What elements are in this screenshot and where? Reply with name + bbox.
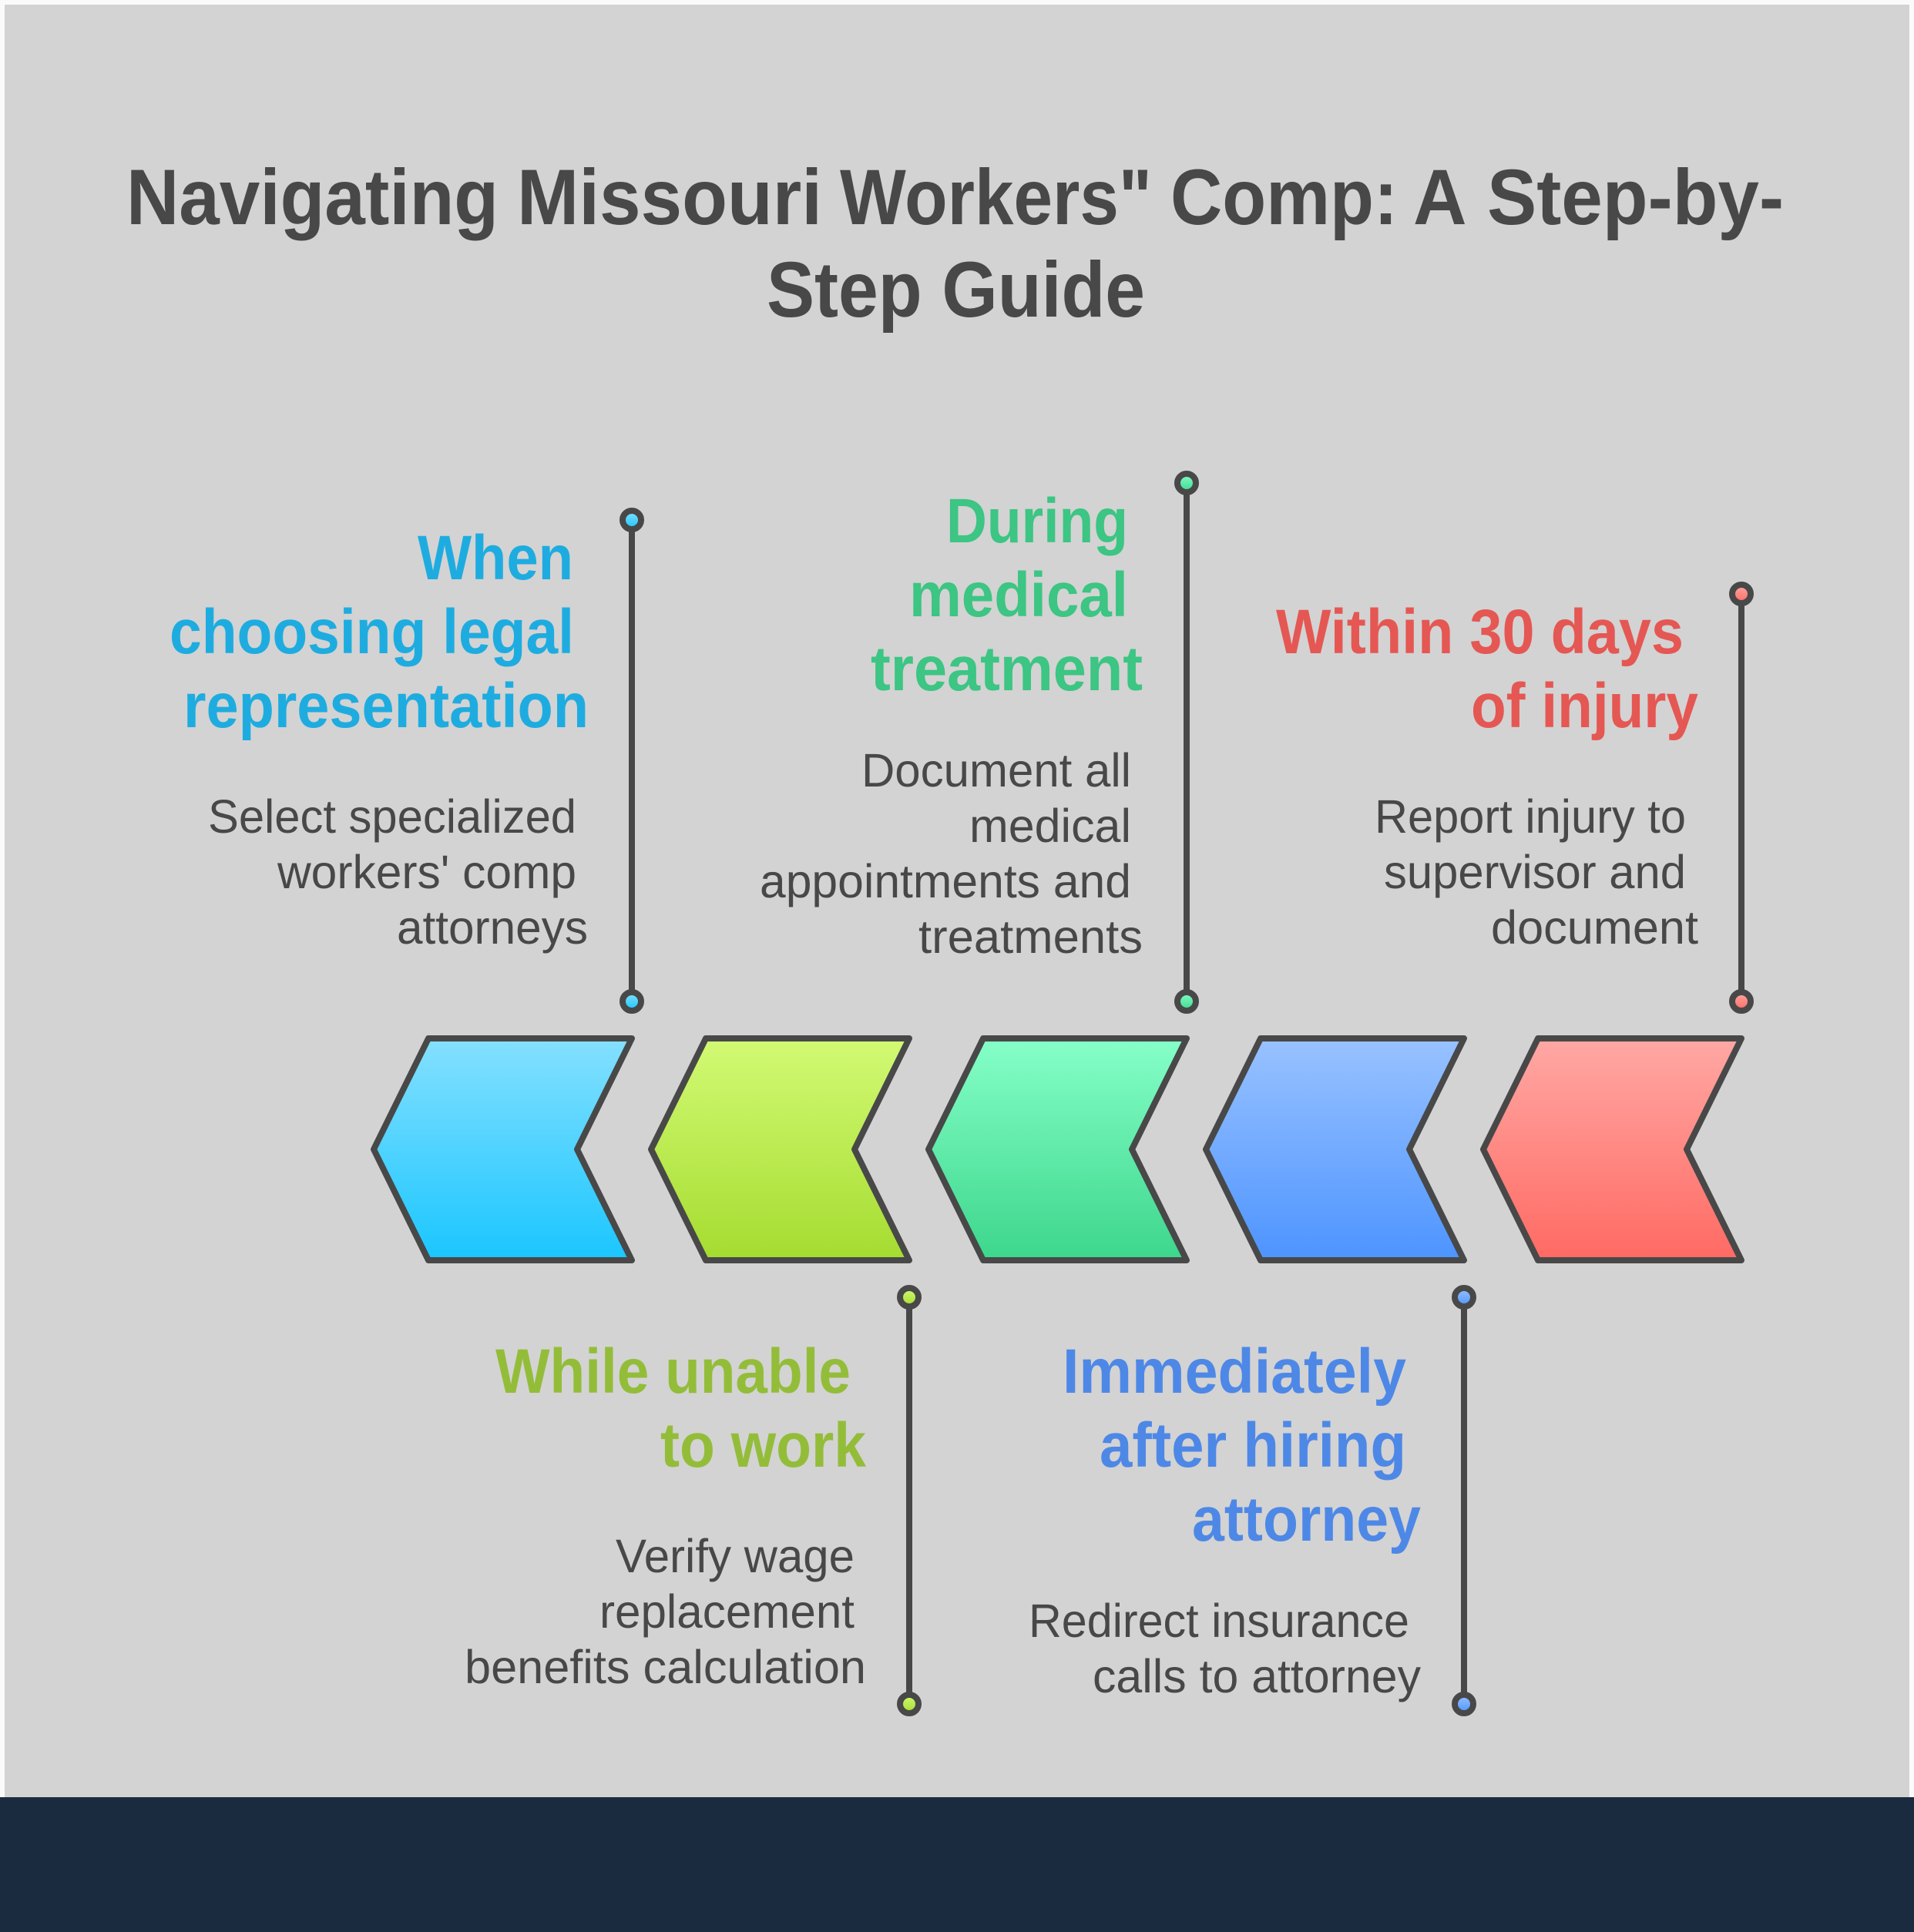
heading: while unable to work: While unable [495,1337,851,1407]
description: report injury [1375,790,1698,954]
heading: when choosing legal representation: choosing legal [170,597,574,667]
description: select attorneys: Select specialized [208,790,576,843]
panel: during medical treatment [760,474,1196,1011]
description: document appointments: medical [969,800,1131,852]
heading: when choosing legal representation [170,523,589,741]
description: select attorneys [208,790,588,954]
heading: when choosing legal representation: representation [183,671,589,741]
description: verify benefits: replacement [599,1585,855,1638]
heading: during medical treatment: During [946,486,1128,556]
heading: when choosing legal representation: When [418,523,573,593]
title: A [1413,153,1465,241]
heading: while unable to work: to work [660,1410,866,1481]
description: redirect calls [1029,1595,1421,1702]
chevron: medical treatment (teal) [928,1038,1187,1260]
chevron: hiring attorney (periwinkle) [1206,1038,1464,1260]
heading: during medical treatment: treatment [871,634,1143,704]
title: Step Guide [767,246,1145,334]
heading: while unable to work [495,1337,866,1481]
title: Navigating [126,153,499,241]
heading: during medical treatment: medical [909,560,1128,630]
description: report injury: document [1491,901,1698,954]
chevron: within 30 days (red) [1483,1038,1741,1260]
heading: within 30 days of injury: of injury [1471,671,1698,741]
description: select attorneys: workers' comp [277,846,576,898]
connector line with end dots (periwinkle) [1455,1288,1473,1713]
heading: immediately after hiring attorney: after hiring [1100,1410,1406,1481]
description: verify benefits: Verify wage [616,1530,855,1582]
description: document appointments [760,744,1143,963]
heading: within 30 days of injury: Within 30 days [1276,597,1684,667]
title: Step-by- [1487,153,1784,241]
description: redirect calls: calls to attorney [1093,1650,1421,1702]
chevron: unable to work (lime) [651,1038,909,1260]
description: document appointments: Document all [861,744,1131,797]
panel: while unable to work [465,1288,918,1713]
heading: immediately after hiring attorney: attorney [1192,1484,1421,1555]
connector line with end dots (blue) [623,511,641,1011]
panel: immediately after hiring attorney [1029,1288,1473,1713]
heading: immediately after hiring attorney [1063,1337,1421,1555]
description: document appointments: appointments and [760,855,1131,907]
title: Missouri [517,153,822,241]
description: report injury: supervisor and [1384,846,1686,898]
description: verify benefits: benefits calculation [465,1641,866,1693]
title [126,153,1784,334]
title: Workers" [840,153,1152,241]
description: verify benefits [465,1530,866,1693]
title: Comp: [1170,153,1398,241]
navy footer band [0,1797,1914,1932]
heading: during medical treatment [871,486,1143,704]
connector line with end dots (teal) [1177,474,1196,1011]
connector line with end dots (red) [1732,585,1751,1011]
chevron row [374,1038,1741,1260]
description: document appointments: treatments [918,911,1143,963]
description: report injury: Report injury to [1375,790,1686,843]
panel: when choosing legal representation [170,511,641,1011]
heading: within 30 days of injury [1276,597,1698,741]
panel: within 30 days of injury [1276,585,1751,1011]
connector line with end dots (lime) [900,1288,918,1713]
heading: immediately after hiring attorney: Immediately [1063,1337,1406,1407]
description: select attorneys: attorneys [397,901,588,954]
chevron: legal representation (blue) [374,1038,632,1260]
description: redirect calls: Redirect insurance [1029,1595,1409,1647]
